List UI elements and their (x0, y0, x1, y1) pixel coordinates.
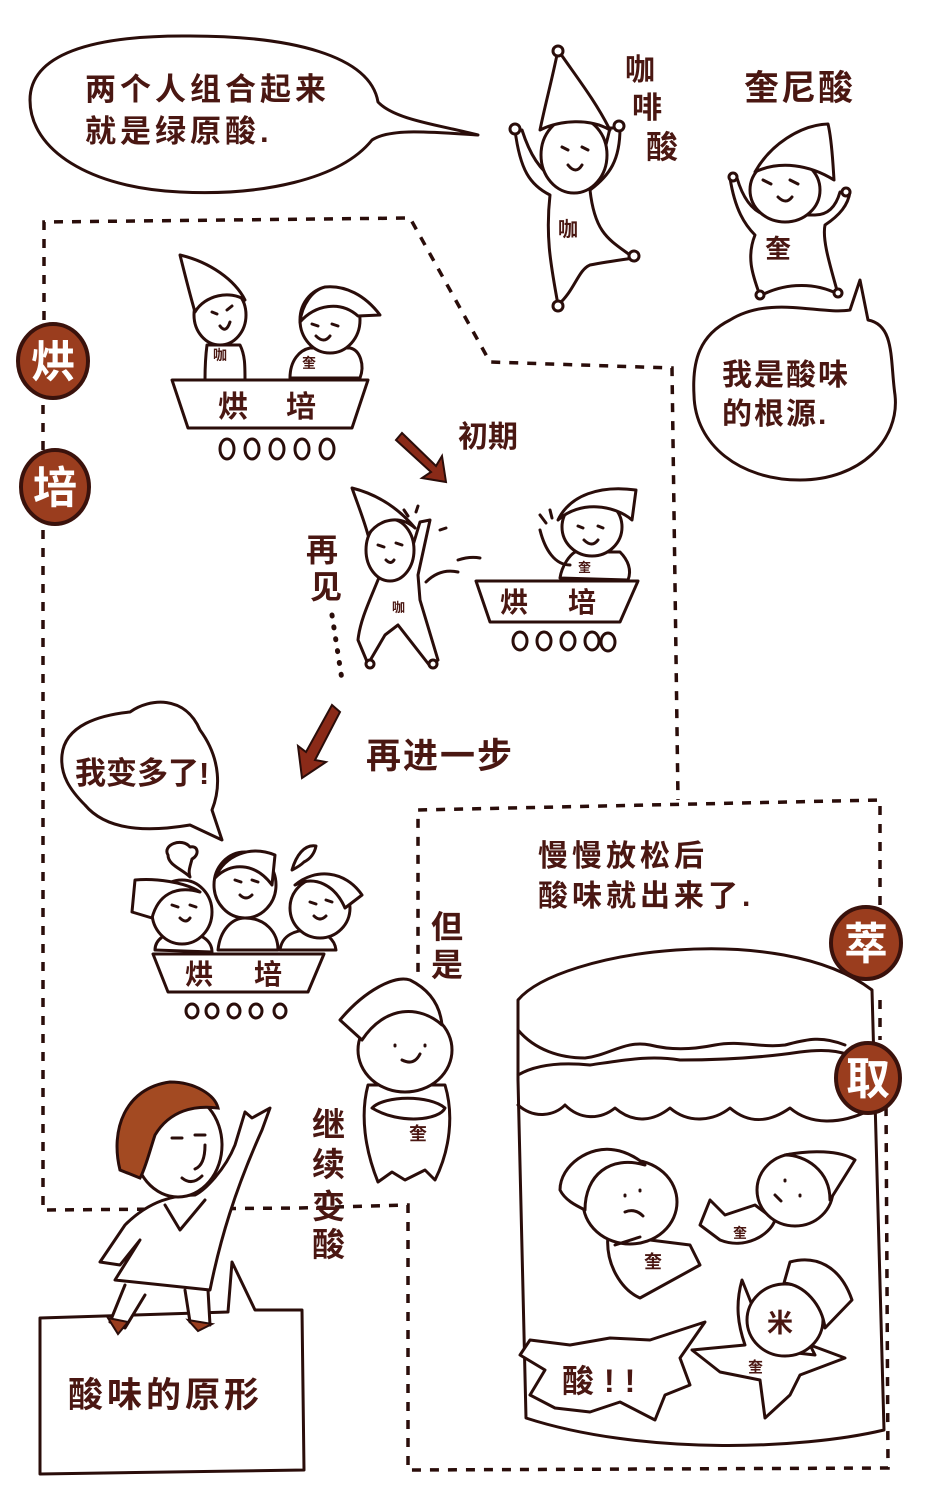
label: quinic acid: 奎尼酸 (744, 69, 855, 108)
scene: two characters in roaster: 培 (286, 391, 316, 424)
speech bubble: root of acidity (694, 280, 895, 480)
character in jar: bottom right: 米 (767, 1308, 793, 1338)
burst bubble: sour: 酸!! (562, 1363, 645, 1399)
scene: three characters in roaster: 培 (254, 959, 282, 990)
label: keep getting sour (312, 1106, 345, 1263)
dashed frame: roasting (43, 218, 888, 1470)
arrow: early stage (396, 433, 446, 482)
scene: goodbye: 咖 (392, 600, 405, 615)
text: relax and acidity comes out (538, 840, 754, 913)
text: relax and acidity comes out: 酸味就出来了. (538, 880, 754, 913)
badge: extract (萃) (831, 907, 901, 979)
label: but: 是 (431, 947, 463, 983)
character: caffeic acid (510, 46, 639, 311)
character: quinic acid (729, 124, 850, 299)
scene: three characters in roaster (132, 842, 362, 1018)
label: keep getting sour: 变 (312, 1188, 345, 1225)
speech bubble: more of me (62, 702, 222, 840)
scene: two characters in roaster: 咖 (213, 347, 227, 363)
character in jar: bottom right (692, 1260, 852, 1418)
speech bubble: chlorogenic acid: 两个人组合起来 (85, 72, 330, 107)
label: keep getting sour: 酸 (312, 1226, 345, 1263)
badge: roast (烘): 烘 (31, 338, 75, 387)
text: relax and acidity comes out: 慢慢放松后 (538, 840, 708, 873)
speech bubble: root of acidity: 我是酸味 (722, 359, 850, 392)
badge: extract (萃): 萃 (844, 920, 888, 969)
character: quinic acid, arms crossed (340, 979, 452, 1182)
speech box: prototype of acidity (40, 1262, 304, 1474)
badge: roast (烘) (18, 324, 88, 398)
jar (518, 949, 884, 1445)
scene: goodbye (352, 488, 638, 668)
label: further: 再进一步 (366, 737, 514, 776)
character: presenter (100, 1082, 270, 1334)
badge: extract (取): 取 (846, 1055, 890, 1104)
label: keep getting sour: 续 (312, 1146, 345, 1183)
speech bubble: chlorogenic acid: 就是绿原酸. (85, 114, 273, 149)
speech bubble: more of me: 我变多了! (75, 756, 209, 791)
label: caffeic acid: 酸 (646, 129, 678, 165)
label: caffeic acid (625, 54, 678, 165)
label: goodbye: 再 (306, 532, 338, 568)
arrow: further (298, 705, 340, 778)
character in jar: right: 奎 (733, 1225, 747, 1241)
character: caffeic acid: 咖 (558, 218, 578, 241)
burst bubble: sour (520, 1322, 705, 1420)
scene: three characters in roaster: 烘 (185, 959, 213, 990)
speech bubble: root of acidity: 的根源. (722, 398, 828, 431)
label: goodbye (306, 532, 342, 605)
label: goodbye: 见 (310, 569, 342, 605)
character in jar: bottom right: 奎 (748, 1358, 763, 1376)
scene: goodbye: 烘 (500, 587, 528, 618)
character: quinic acid: 奎 (765, 234, 791, 264)
character in jar: left: 奎 (644, 1252, 662, 1272)
character in jar: right (700, 1152, 855, 1243)
badge: roast (培): 培 (33, 464, 77, 513)
label: caffeic acid: 啡 (632, 92, 662, 125)
scene: two characters in roaster (172, 255, 380, 459)
badge: extract (取) (836, 1043, 900, 1113)
scene: goodbye: 培 (568, 587, 596, 618)
label: early stage: 初期 (458, 421, 518, 454)
label: keep getting sour: 继 (312, 1106, 345, 1143)
label: caffeic acid: 咖 (625, 54, 655, 87)
label: but (431, 909, 463, 983)
dotted trail (332, 615, 342, 680)
speech bubble: chlorogenic acid (30, 36, 478, 193)
speech box: prototype of acidity: 酸味的原形 (68, 1376, 263, 1415)
character: quinic acid, arms crossed: 奎 (409, 1124, 427, 1144)
scene: goodbye: 奎 (578, 560, 591, 575)
label: but: 但 (431, 909, 463, 945)
badge: roast (培) (21, 450, 89, 524)
scene: two characters in roaster: 奎 (302, 355, 316, 371)
character in jar: left (560, 1149, 700, 1298)
scene: two characters in roaster: 烘 (218, 391, 248, 424)
